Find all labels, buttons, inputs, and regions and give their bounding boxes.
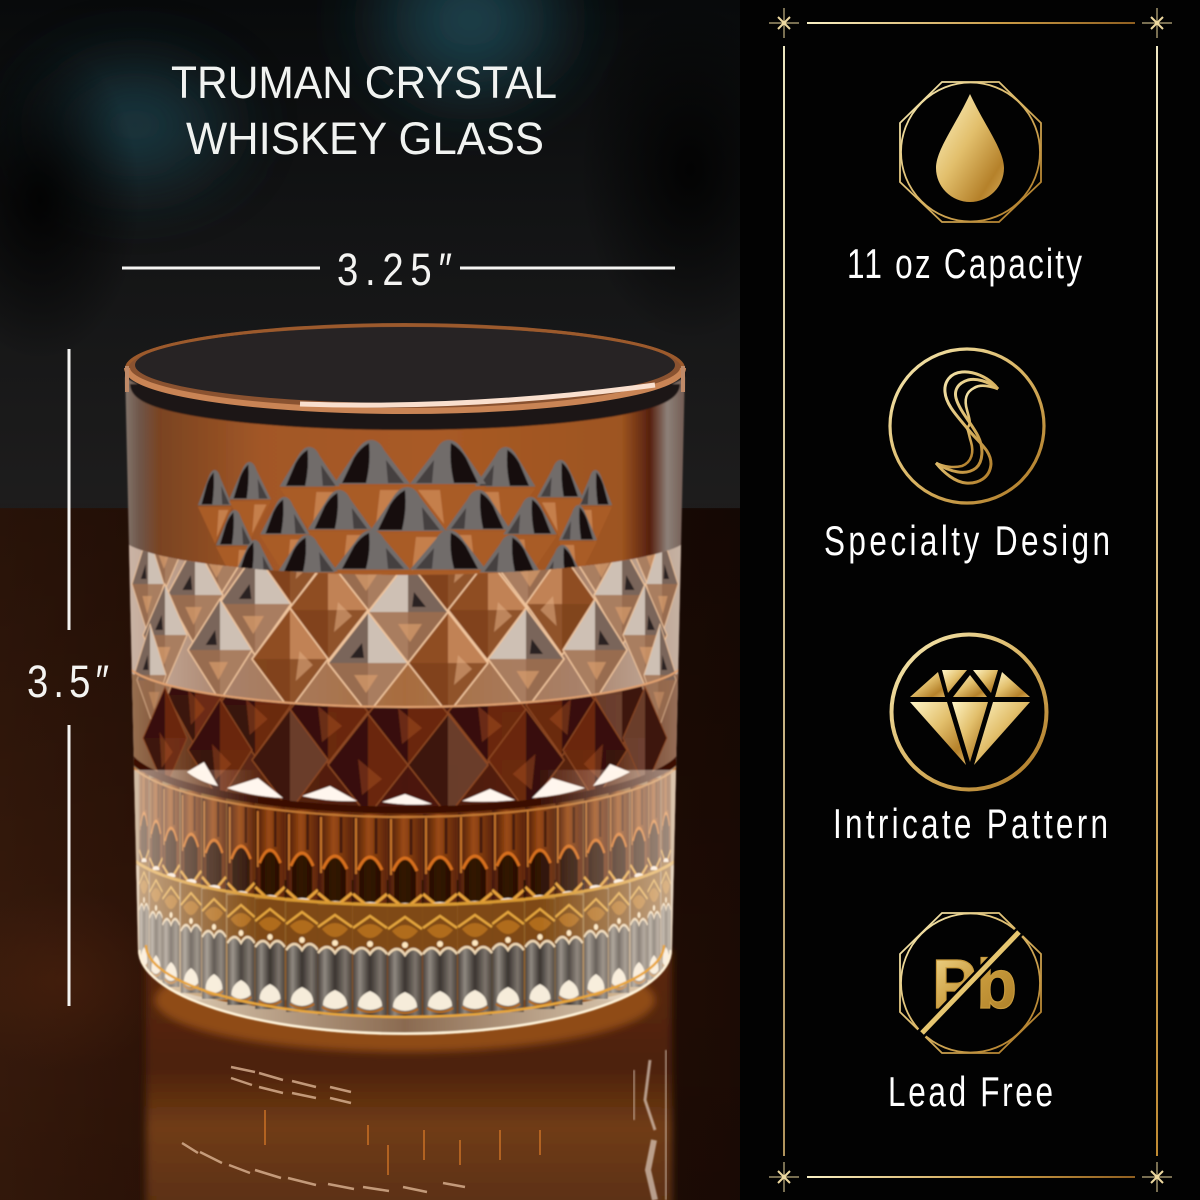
corner star top right <box>1142 8 1172 38</box>
corner star bottom right <box>1142 1162 1172 1192</box>
corner star bottom left <box>769 1162 799 1192</box>
copper upper band <box>124 376 686 576</box>
lower flutes <box>139 862 671 1017</box>
liquid facets <box>136 675 677 808</box>
gold frame <box>769 8 1172 1192</box>
dark rim of diamond band <box>132 756 678 814</box>
icon: lead free Pb in octagon <box>900 913 1041 1053</box>
base highlight curve <box>138 950 672 1035</box>
liquid surface line <box>131 669 679 710</box>
whiskey glass <box>120 323 690 1050</box>
glass base ring <box>178 991 632 1034</box>
table reflection of glass <box>146 948 672 1200</box>
amber flute band <box>133 764 677 880</box>
gold band line <box>136 860 674 908</box>
lower fluted band <box>136 865 674 1001</box>
right information panel <box>740 0 1200 1200</box>
label: specialty design: Specialty Design <box>824 517 1110 564</box>
lattice facets <box>132 550 678 706</box>
photo background <box>0 0 800 1200</box>
label: lead free: Lead Free <box>888 1068 1053 1115</box>
title: TRUMAN CRYSTAL <box>171 57 557 108</box>
label: capacity: 11 oz Capacity <box>847 240 1082 287</box>
width dimension: 3.25 inches: 3.25″ <box>337 244 452 295</box>
dark band below rim <box>140 384 670 420</box>
width dimension: 3.25 inches <box>122 244 675 295</box>
title: WHISKEY GLASS <box>186 113 544 164</box>
icon: diamond in circle <box>892 634 1046 790</box>
copper rim highlight <box>134 767 676 820</box>
height dimension: 3.5 inches <box>27 349 109 1006</box>
icon: drop in octagon <box>900 82 1041 222</box>
clear lattice band <box>120 535 690 760</box>
icon: lead free Pb in octagon: Pb <box>932 945 1017 1023</box>
glass rim front <box>127 325 683 411</box>
glass rim back and opening <box>125 323 685 413</box>
title <box>171 57 557 164</box>
icon: S swirl in circle <box>890 349 1044 503</box>
height dimension: 3.5 inches: 3.5″ <box>27 656 109 707</box>
glass body bands <box>120 368 690 1050</box>
copper band facets <box>198 439 612 574</box>
label: intricate pattern: Intricate Pattern <box>833 800 1108 847</box>
clear sides of lower bands <box>125 770 685 1000</box>
whiskey liquid band <box>131 673 679 808</box>
amber flutes <box>139 770 671 909</box>
white lens highlights above rim <box>187 762 630 805</box>
corner star top left <box>769 8 799 38</box>
gold base inner line <box>146 945 664 1017</box>
